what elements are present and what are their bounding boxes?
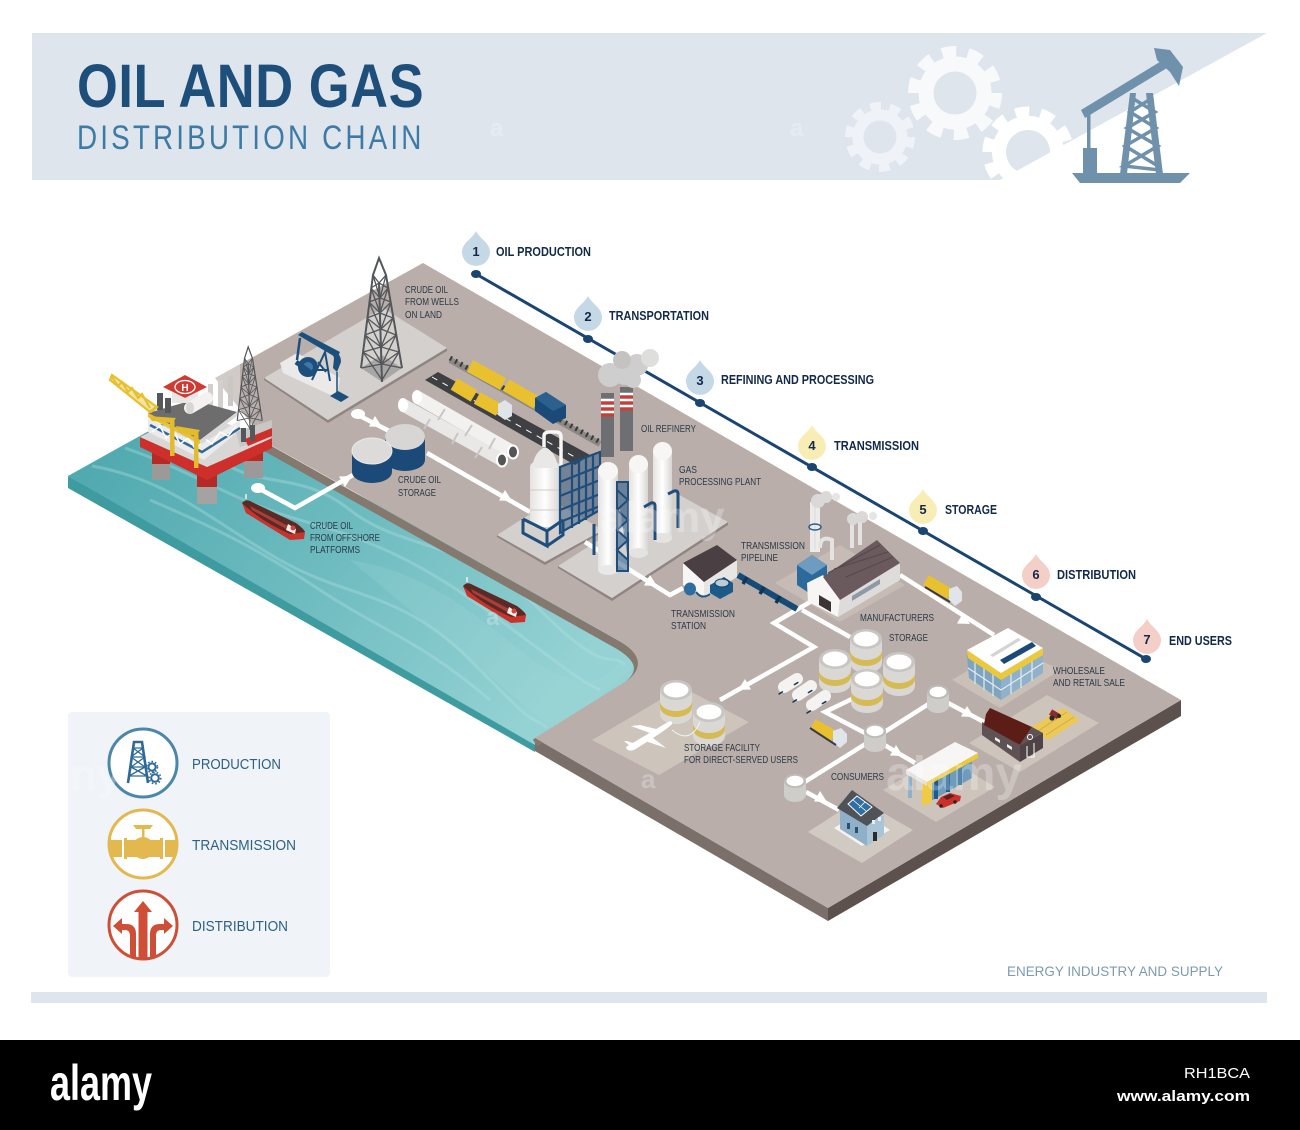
footer caption: ENERGY INDUSTRY AND SUPPLY	[1007, 963, 1224, 979]
icon: gears	[849, 52, 1068, 192]
navy lattice	[523, 452, 600, 546]
label: crude oil storage: CRUDE OIL	[398, 474, 441, 486]
step 7: END USERS	[1169, 633, 1232, 648]
step 4	[798, 425, 919, 460]
lattice column	[617, 482, 628, 571]
label: crude oil wells: CRUDE OIL	[405, 284, 448, 296]
subtitle: DISTRIBUTION CHAIN	[77, 118, 421, 157]
ships	[242, 494, 305, 540]
label: transmission pipeline: TRANSMISSION	[741, 540, 805, 552]
field with tractor	[1030, 708, 1080, 740]
side deck	[236, 420, 272, 447]
car	[936, 793, 961, 808]
icon: pumpjack	[1072, 48, 1190, 183]
crude oil storage tanks	[352, 424, 425, 483]
roof	[823, 540, 900, 600]
transmission pipeline	[738, 575, 797, 609]
stock photo footer band	[0, 1040, 1300, 1130]
smoke	[598, 349, 659, 388]
label: manufacturers: MANUFACTURERS	[860, 612, 934, 624]
label: transmission pipeline: PIPELINE	[741, 552, 778, 564]
footer bar	[31, 992, 1267, 1003]
legend panel	[68, 712, 330, 977]
crane	[110, 375, 157, 412]
step 1: 1	[472, 244, 480, 259]
waves	[92, 448, 625, 728]
stock photo footer band: RH1BCA	[1184, 1065, 1250, 1082]
upper deck	[148, 400, 237, 440]
red pontoon deck	[140, 437, 272, 480]
flow arrows	[251, 409, 974, 802]
step 1	[462, 231, 591, 266]
white flow pipes	[251, 409, 994, 810]
refinery tower	[530, 432, 561, 527]
label: consumers: CONSUMERS	[831, 771, 884, 783]
stock watermarks: a	[641, 764, 656, 794]
distribution nodes	[784, 685, 949, 802]
label: crude oil wells: ON LAND	[405, 309, 442, 321]
delivery truck top	[925, 580, 962, 606]
label: transmission pipeline	[741, 540, 805, 564]
land platform	[215, 263, 1181, 921]
road tanker truck	[810, 724, 847, 748]
retail building	[967, 628, 1043, 700]
stock watermarks: a	[490, 115, 504, 142]
white bullet tanks	[779, 679, 830, 713]
barn	[982, 708, 1043, 762]
label: offshore platforms: CRUDE OIL	[310, 520, 353, 532]
label: offshore platforms	[310, 520, 380, 556]
train	[470, 366, 566, 424]
label: crude oil wells: FROM WELLS	[405, 296, 459, 308]
step 2: TRANSPORTATION	[609, 308, 709, 323]
step 6: DISTRIBUTION	[1057, 567, 1136, 582]
step 3: REFINING AND PROCESSING	[721, 372, 874, 387]
stock watermarks: alamy	[886, 748, 1022, 801]
airplane	[624, 721, 700, 751]
striped structure	[208, 376, 233, 409]
label: storage facility	[684, 742, 798, 766]
navy pipes	[594, 491, 678, 555]
diagram labels	[310, 284, 1125, 783]
house	[834, 790, 890, 846]
legend labels: TRANSMISSION	[192, 837, 296, 854]
road truck	[454, 384, 512, 420]
step 3: 3	[696, 373, 704, 388]
stock watermarks: ny	[70, 751, 122, 800]
road and rail	[425, 358, 600, 465]
stock photo footer band: www.alamy.com	[1116, 1088, 1250, 1105]
label: gas plant: PROCESSING PLANT	[679, 476, 761, 488]
step 6: 6	[1032, 567, 1040, 582]
label: offshore platforms: PLATFORMS	[310, 544, 360, 556]
pumpjack	[280, 332, 349, 402]
helipad: H	[181, 383, 189, 394]
label: wholesale	[1053, 665, 1125, 689]
land derrick	[361, 258, 402, 382]
label: transmission station: STATION	[671, 620, 706, 632]
gas tower 3	[653, 442, 672, 543]
step 2	[574, 296, 709, 331]
gas tower 1	[598, 462, 618, 575]
white tank	[186, 398, 207, 414]
label: wholesale: WHOLESALE	[1053, 665, 1105, 677]
left storage tanks	[660, 680, 725, 746]
step 7: 7	[1143, 632, 1151, 647]
label: crude oil storage	[398, 474, 441, 499]
offshore platform	[110, 347, 272, 504]
step 6	[1022, 554, 1136, 589]
step 3	[686, 360, 874, 395]
large white pipes	[398, 390, 518, 466]
building walls	[807, 575, 840, 617]
factory chimneys and smoke	[809, 491, 877, 560]
chimneys	[601, 387, 633, 457]
label: gas plant	[679, 464, 761, 488]
label: storage facility: STORAGE FACILITY	[684, 742, 760, 754]
label: gas plant: GAS	[679, 464, 697, 476]
label: transmission station	[671, 608, 735, 632]
title: OIL AND GAS	[77, 52, 427, 121]
legend: distribution	[109, 891, 177, 960]
label: storage facility: FOR DIRECT-SERVED USERS	[684, 754, 798, 766]
stock watermarks: alamy	[600, 493, 725, 542]
stock photo footer band: alamy	[50, 1055, 152, 1111]
step 7	[1133, 619, 1232, 654]
timeline	[462, 231, 1232, 663]
helipad	[163, 375, 207, 403]
small derrick	[237, 347, 262, 430]
oil refinery	[523, 349, 678, 575]
legend labels: PRODUCTION	[192, 756, 281, 773]
legend labels	[192, 756, 296, 935]
stock watermarks: a	[790, 115, 804, 142]
gas tower 2	[629, 455, 648, 558]
ground pads	[264, 308, 1099, 863]
ship 2	[463, 577, 526, 623]
yellow columns	[148, 416, 200, 468]
label: crude oil storage: STORAGE	[398, 487, 436, 499]
factory	[797, 491, 900, 617]
legend: transmission	[108, 810, 179, 878]
sea	[68, 408, 660, 752]
step 4: 4	[808, 438, 816, 453]
step 5: STORAGE	[945, 502, 997, 517]
truss level	[148, 418, 240, 460]
legend: production	[109, 729, 177, 797]
step 2: 2	[584, 309, 592, 324]
legend labels: DISTRIBUTION	[192, 918, 288, 935]
step 5: 5	[919, 502, 927, 517]
gas station	[906, 742, 978, 808]
label: oil refinery: OIL REFINERY	[641, 423, 696, 435]
label: transmission station: TRANSMISSION	[671, 608, 735, 620]
label: storage: STORAGE	[889, 632, 928, 644]
legs	[152, 445, 263, 504]
label: crude oil wells	[405, 284, 459, 321]
stock watermarks	[70, 115, 1022, 801]
transmission station	[683, 545, 737, 599]
step 5	[909, 489, 997, 524]
step 1: OIL PRODUCTION	[496, 244, 591, 259]
gray tanks	[157, 393, 171, 413]
label: wholesale: AND RETAIL SALE	[1053, 677, 1125, 689]
header banner	[32, 33, 1267, 192]
step 4: TRANSMISSION	[834, 438, 919, 453]
label: offshore platforms: FROM OFFSHORE	[310, 532, 380, 544]
central storage tanks	[819, 629, 915, 713]
blue building	[797, 555, 827, 595]
stock watermarks: a	[486, 604, 500, 631]
